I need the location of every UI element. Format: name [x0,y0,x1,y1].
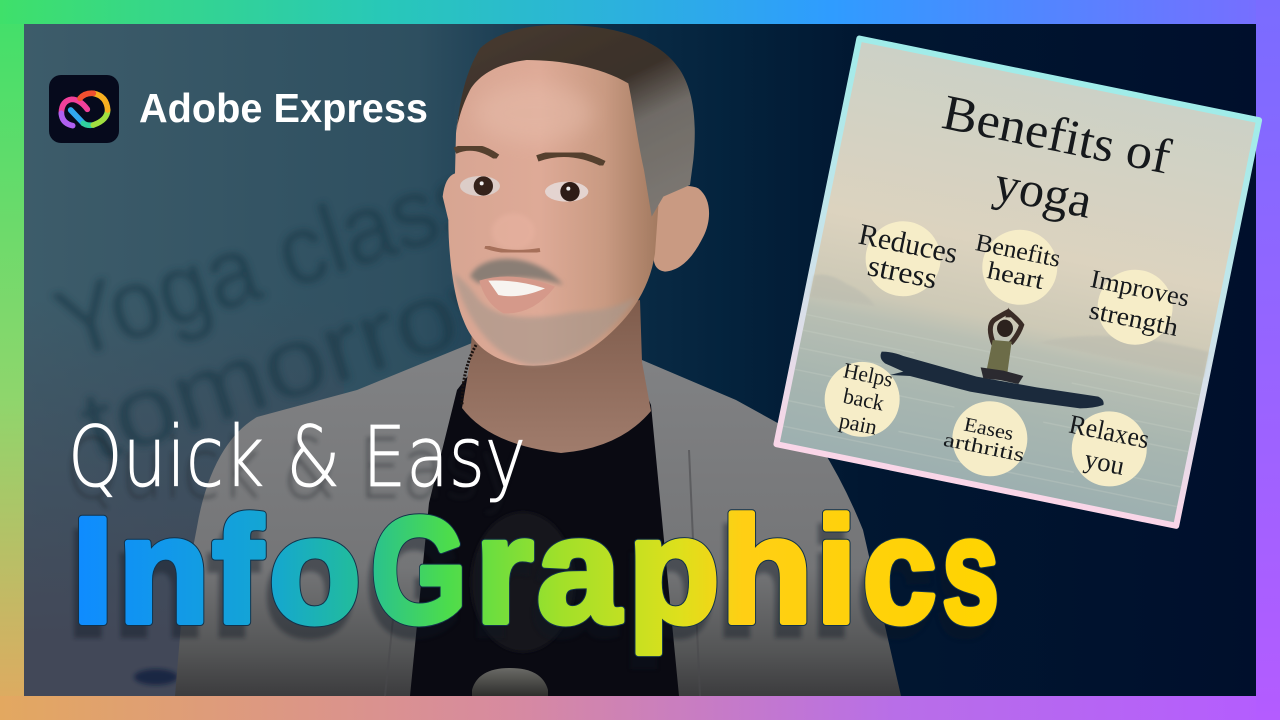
water ripples [783,314,1200,507]
bubble: Helps back pain: pain [837,408,879,440]
bubble: Benefits heart [965,221,1065,312]
nose [485,213,540,252]
heading: InfoGraphics: Info [72,486,361,654]
bubble: Benefits heart: Benefits [973,229,1063,273]
bubble: Relaxes you: Relaxes [1067,409,1152,454]
left brow [455,147,497,157]
face [443,53,658,366]
cardigan [175,343,901,696]
bubble: Eases arthritis [938,393,1034,483]
yogi arms [990,312,1022,345]
heading: InfoGraphics: G [371,486,467,654]
left eye [460,176,500,196]
heading: Quick & Easy: Quick & Easy [68,408,526,506]
yogi hands [1005,307,1011,317]
neck [462,300,651,453]
brand name: Adobe Express [139,85,428,131]
heading: Quick & Easy: Quick & Easy [65,420,521,518]
heading: InfoGraphics: G [371,486,467,654]
bubble: Relaxes you [1059,403,1153,493]
right brow [537,154,604,164]
bubble: Helps back pain [818,355,906,444]
bubble: Reduces stress: stress [865,249,940,296]
bubble: Helps back pain: back [841,383,886,416]
heading: InfoGraphics: c [863,486,937,654]
microphone foam [471,512,575,652]
right eye [545,182,588,202]
jaw stubble [453,273,637,365]
cardigan placket [385,450,700,696]
black shirt [410,368,679,696]
heading: InfoGraphics: c [858,499,932,667]
background panel with blurred text: tomorrow [67,232,550,482]
bubble: Improves strength: strength [1087,295,1181,342]
mouth [479,277,555,313]
card heading [926,83,1176,242]
heading: InfoGraphics: G [366,499,462,667]
ear [653,186,709,272]
bubble: Helps back pain: Helps [841,357,895,392]
microphone body [472,668,548,696]
yogi legs [981,367,1023,384]
heading: InfoGraphics: s [942,486,999,654]
bubble: Benefits heart: heart [985,257,1046,295]
hills [810,271,1209,377]
icon: app tile [49,75,119,143]
paddle board [881,352,1104,408]
heading: InfoGraphics: raphi [470,499,852,667]
card heading: Benefits of [938,83,1176,185]
mustache [470,259,563,285]
heading: InfoGraphics: Info [72,486,361,654]
bubble: Improves strength: Improves [1088,264,1192,313]
heading: InfoGraphics: raphi [475,486,857,654]
bubble: Eases arthritis: Eases [962,414,1016,445]
yoga infographic card [773,35,1263,529]
necklace [462,345,476,405]
presenter [175,25,901,696]
heading: InfoGraphics [67,486,999,667]
logo: Adobe Express [49,75,428,143]
heading: InfoGraphics: s [937,499,994,667]
bubble: Eases arthritis: arthritis [942,429,1027,467]
heading: InfoGraphics: s [942,486,999,654]
forehead highlight [473,83,593,143]
yogi head [997,320,1013,337]
bubble: Reduces stress: Reduces [856,218,960,270]
heading: InfoGraphics: Info [67,499,356,667]
bubble: Improves strength [1080,261,1193,354]
card heading: yoga [990,154,1097,229]
background panel with blurred text: Yoga class [42,139,495,380]
bubble: Reduces stress [849,212,962,306]
yogi torso [987,340,1012,373]
bubble: Relaxes you: you [1082,444,1128,481]
paddle board and yogi [881,307,1104,408]
heading: InfoGraphics: c [863,486,937,654]
hair [457,25,695,217]
heading: InfoGraphics: raphi [475,486,857,654]
head [443,25,709,366]
